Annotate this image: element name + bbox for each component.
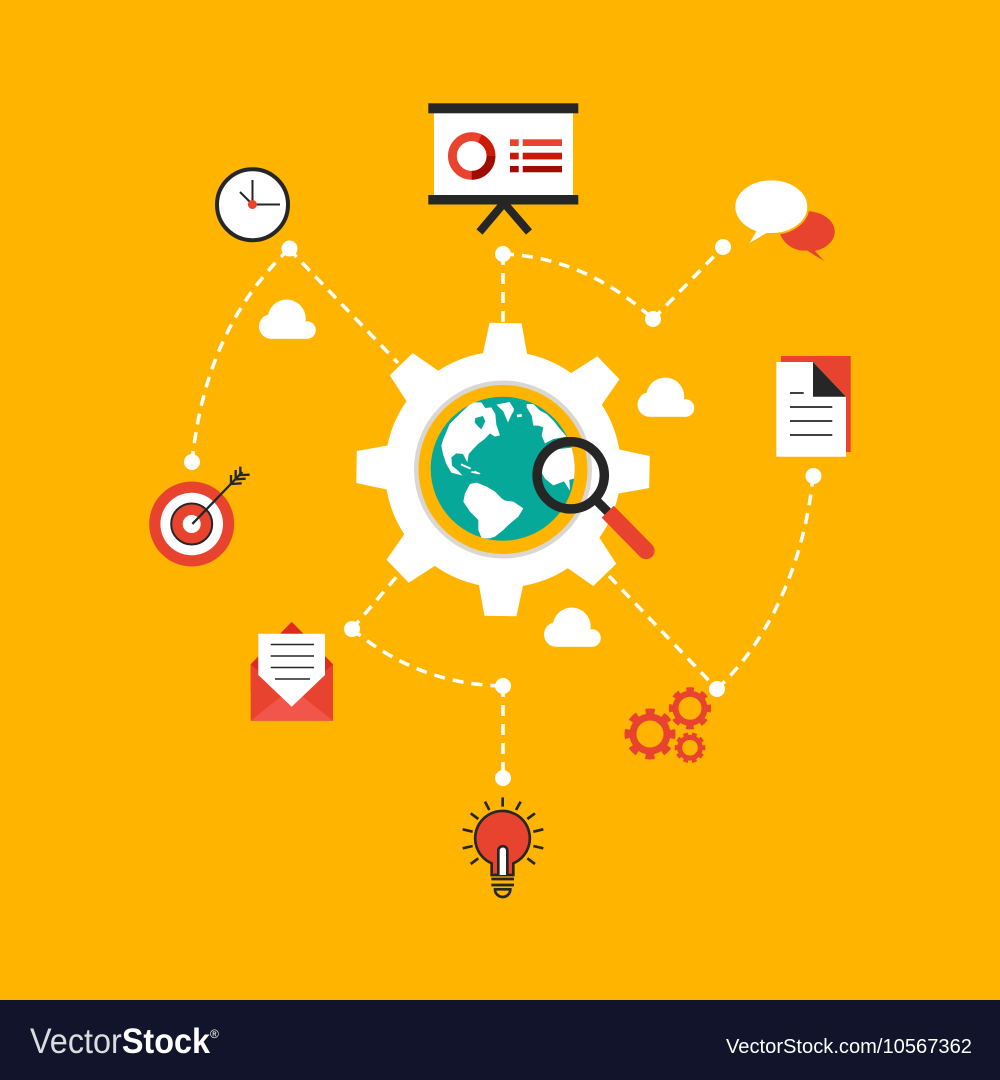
letter [258,634,325,707]
arrow [192,467,250,524]
small cog [676,734,704,761]
icon: document [776,356,851,457]
icon: cloud top left [259,300,316,339]
brand logo text: VectorStock [30,1022,210,1061]
gray ring [414,380,592,558]
large cog [628,712,672,756]
icon: presentation board [428,103,578,232]
icon: cog cluster [628,690,709,761]
icon: light bulb [463,797,543,897]
icon: archery target [149,467,250,566]
africa in lens [542,448,575,490]
icon: cloud right of gear [638,378,694,417]
north america [441,402,514,476]
globe ocean [431,397,575,541]
image id text: VectorStock.com/10567362 [726,1036,972,1058]
icon: speech bubbles [734,179,835,261]
south america [463,471,523,538]
dashed connector network [192,247,813,778]
icon: magnifying glass [537,442,654,559]
globe continents [441,402,580,538]
icon: envelope with letter [251,622,333,721]
screen [434,113,573,195]
bottom bar [428,195,578,204]
central gear with globe [354,320,652,619]
list rows [510,139,562,172]
europe and asia [507,404,567,443]
gear wheel [354,320,652,619]
connector nodes [184,239,822,786]
donut chart [452,137,491,175]
stand legs [480,203,529,232]
top bar [428,103,578,113]
medium cog [671,690,709,727]
footer bar [0,1000,1000,1080]
icon: cloud below gear [544,608,601,647]
registered mark: ® [210,1027,219,1041]
icon: wall clock [217,169,288,240]
gold ring [418,385,588,554]
